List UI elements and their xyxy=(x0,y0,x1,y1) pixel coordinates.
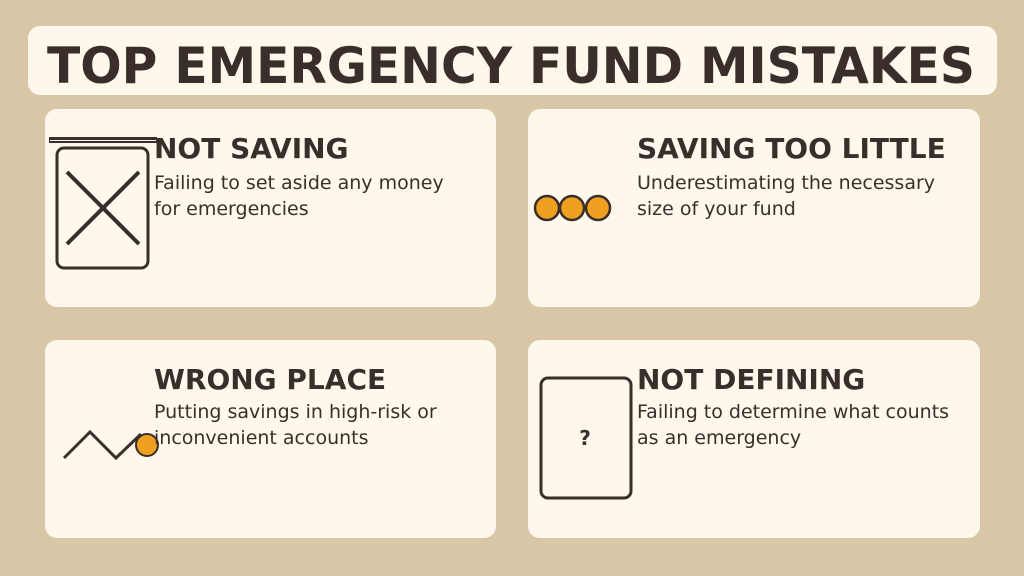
icon: question card: ? xyxy=(579,426,591,450)
icon: crossed jar xyxy=(49,137,157,268)
text: wrong place: Putting savings in high-risk or xyxy=(154,401,437,423)
panel: wrong place xyxy=(45,340,496,538)
panel: not saving xyxy=(45,109,496,307)
text: not defining: as an emergency xyxy=(637,427,801,449)
panel: not defining xyxy=(528,340,980,538)
title: TOP EMERGENCY FUND MISTAKES xyxy=(47,37,975,95)
panel: saving too little xyxy=(528,109,980,307)
text: saving too little: Underestimating the necessary xyxy=(637,172,935,194)
heading: not saving: NOT SAVING xyxy=(154,132,349,165)
text: not saving: for emergencies xyxy=(154,198,309,220)
heading: not defining: NOT DEFINING xyxy=(637,363,865,396)
text: wrong place: inconvenient accounts xyxy=(154,427,369,449)
icon: coins xyxy=(535,196,610,220)
text: saving too little: size of your fund xyxy=(637,198,796,220)
icon: question card xyxy=(541,378,631,498)
text: not saving: Failing to set aside any money xyxy=(154,172,444,194)
heading: saving too little: SAVING TOO LITTLE xyxy=(637,132,946,165)
text: not defining: Failing to determine what counts xyxy=(637,401,949,423)
icon: zigzag chart xyxy=(64,432,158,458)
heading: wrong place: WRONG PLACE xyxy=(154,363,386,396)
